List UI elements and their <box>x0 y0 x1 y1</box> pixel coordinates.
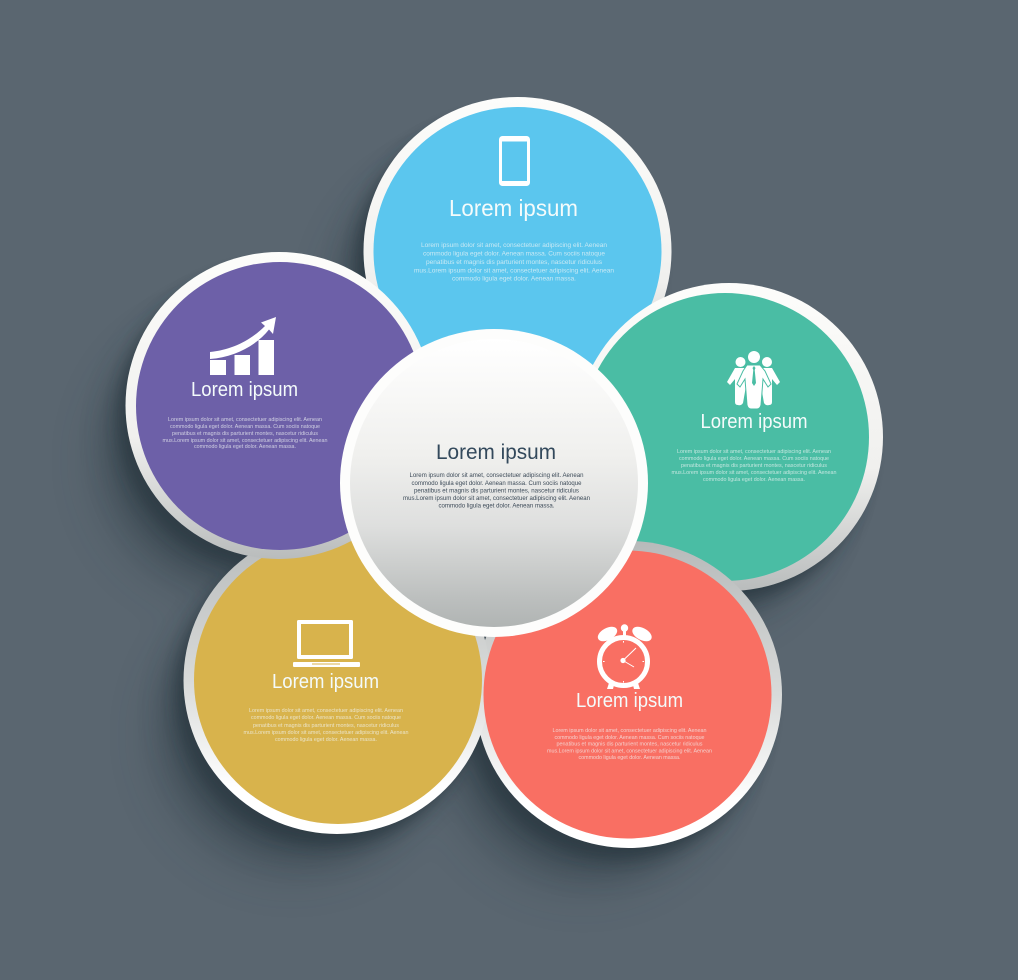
text block: red: commodo ligula eget dolor. Aenean massa. Cum sociis natoque <box>554 735 704 741</box>
text block: blue <box>414 242 614 282</box>
text block: centre: commodo ligula eget dolor. Aenean massa. Cum sociis natoque <box>412 481 582 487</box>
text block: green: penatibus et magnis dis parturient montes, nascetur ridiculus <box>681 463 827 469</box>
heading: red: Lorem ipsum <box>576 690 683 712</box>
icon: smartphone <box>499 136 530 186</box>
panel: central white circle <box>340 329 648 637</box>
panel: blue circle <box>364 97 672 405</box>
text block: purple: Lorem ipsum dolor sit amet, consectetuer adipiscing elit. Aenean <box>168 417 322 423</box>
text block: blue: commodo ligula eget dolor. Aenean massa. <box>452 276 576 282</box>
panel: purple circle <box>126 252 432 559</box>
text block: yellow <box>244 708 408 743</box>
text block: centre: commodo ligula eget dolor. Aenean massa. <box>438 504 555 510</box>
heading: centre: Lorem ipsum <box>436 441 556 464</box>
text block: red <box>547 728 712 761</box>
text block: yellow: commodo ligula eget dolor. Aenean massa. <box>275 737 377 743</box>
text block: blue: commodo ligula eget dolor. Aenean massa. Cum sociis natoque <box>423 250 605 258</box>
directional drop shadows <box>94 114 870 890</box>
text block: purple <box>162 417 328 450</box>
text block: blue: penatibus et magnis dis parturient montes, nascetur ridiculus <box>426 259 602 266</box>
heading: yellow: Lorem ipsum <box>272 671 379 693</box>
icon: rising bar chart with arrow <box>210 317 276 375</box>
text block: blue: Lorem ipsum dolor sit amet, consectetuer adipiscing elit. Aenean <box>421 242 607 249</box>
text block: purple: mus.Lorem ipsum dolor sit amet, consectetuer adipiscing elit. Aenean <box>162 438 328 444</box>
text block: centre: mus.Lorem ipsum dolor sit amet, consectetuer adipiscing elit. Aenean <box>403 496 590 502</box>
text block: green: commodo ligula eget dolor. Aenean massa. <box>703 477 805 483</box>
red circle rim <box>475 541 782 848</box>
icon: alarm clock <box>595 624 654 689</box>
text block: yellow: Lorem ipsum dolor sit amet, consectetuer adipiscing elit. Aenean <box>249 708 403 714</box>
text block: purple: commodo ligula eget dolor. Aenean massa. <box>194 444 296 450</box>
text block: purple: penatibus et magnis dis parturient montes, nascetur ridiculus <box>172 431 318 437</box>
text block: red: mus.Lorem ipsum dolor sit amet, consectetuer adipiscing elit. Aenean <box>547 748 712 754</box>
icon: group of people <box>727 351 780 409</box>
text block: centre: Lorem ipsum dolor sit amet, consectetuer adipiscing elit. Aenean <box>410 473 584 479</box>
text block: green <box>672 449 836 483</box>
text block: green: mus.Lorem ipsum dolor sit amet, consectetuer adipiscing elit. Aenean <box>672 470 836 476</box>
heading: purple: Lorem ipsum <box>191 379 298 401</box>
text block: red: Lorem ipsum dolor sit amet, consectetuer adipiscing elit. Aenean <box>552 728 706 734</box>
text block: centre: penatibus et magnis dis parturient montes, nascetur ridiculus <box>414 488 579 494</box>
text block: yellow: penatibus et magnis dis parturient montes, nascetur ridiculus <box>253 723 399 729</box>
text block: green: commodo ligula eget dolor. Aenean massa. Cum sociis natoque <box>679 456 829 462</box>
text block: green: Lorem ipsum dolor sit amet, consectetuer adipiscing elit. Aenean <box>677 449 831 455</box>
panel: red circle <box>484 550 772 838</box>
heading: green: Lorem ipsum <box>700 411 808 433</box>
icon: laptop <box>293 620 360 667</box>
text block: yellow: commodo ligula eget dolor. Aenean massa. Cum sociis natoque <box>251 715 401 721</box>
panel: green circle <box>575 283 883 591</box>
heading: blue: Lorem ipsum <box>449 195 578 221</box>
text block: red: penatibus et magnis dis parturient montes, nascetur ridiculus <box>556 742 703 748</box>
text block: red: commodo ligula eget dolor. Aenean massa. <box>578 755 681 761</box>
text block: purple: commodo ligula eget dolor. Aenean massa. Cum sociis natoque <box>170 424 320 430</box>
text block: centre <box>403 473 590 510</box>
text block: blue: mus.Lorem ipsum dolor sit amet, consectetuer adipiscing elit. Aenean <box>414 268 614 274</box>
text block: yellow: mus.Lorem ipsum dolor sit amet, consectetuer adipiscing elit. Aenean <box>244 730 408 736</box>
panel: yellow circle <box>184 527 490 834</box>
